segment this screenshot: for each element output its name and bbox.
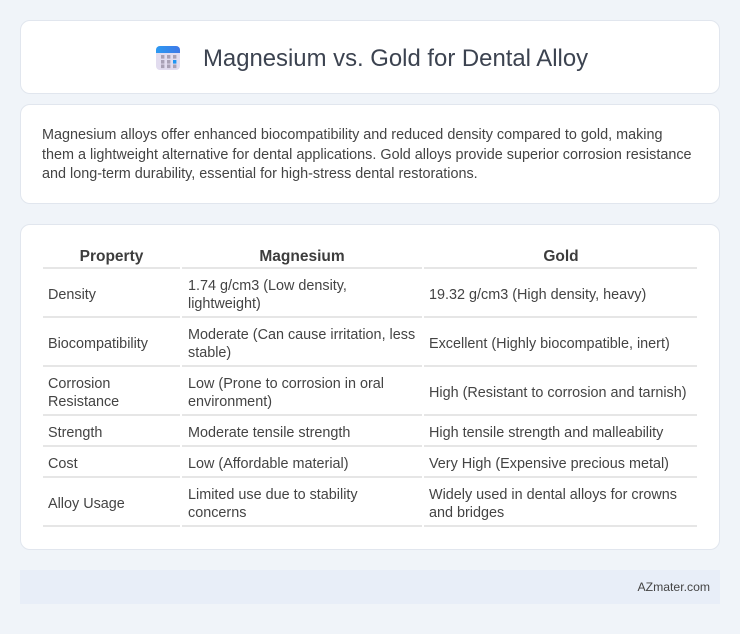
row: Alloy Usage: Widely used in dental alloys for crowns [429, 487, 677, 503]
row: Strength: Strength [48, 425, 102, 441]
row: Corrosion Resistance: High (Resistant to corrosion and tarnish) [429, 385, 687, 401]
row: Cost: Low (Affordable material) [188, 456, 349, 472]
row: Strength: Moderate tensile strength [188, 425, 350, 441]
row: Density: lightweight) [188, 296, 261, 312]
row: Strength [48, 425, 664, 441]
table header: Magnesium: Magnesium [259, 248, 345, 265]
summary text: Magnesium alloys offer enhanced biocompatibility and reduced density compared to gold, making [42, 127, 662, 143]
row: Density: 1.74 g/cm3 (Low density, [188, 278, 347, 294]
row: Alloy Usage: Limited use due to stability [188, 487, 358, 503]
panel: comparison table [20, 224, 720, 550]
row: Corrosion Resistance: Resistance [48, 394, 119, 410]
table header: Gold: Gold [543, 248, 579, 265]
footer bar [20, 570, 720, 604]
row: Corrosion Resistance: environment) [188, 394, 272, 410]
table header: Property: Property [80, 248, 143, 265]
row: Alloy Usage: and bridges [429, 505, 504, 521]
row: Biocompatibility: stable) [188, 345, 231, 361]
summary text: and long-term durability, essential for high-stress dental restorations. [42, 166, 478, 182]
panel: title card [20, 20, 720, 94]
row: Cost: Very High (Expensive precious metal) [429, 456, 669, 472]
row: Biocompatibility [48, 327, 670, 361]
summary text [42, 127, 692, 182]
row: Density [48, 278, 646, 312]
row: Cost: Cost [48, 456, 78, 472]
row: Corrosion Resistance: Corrosion [48, 376, 110, 392]
row: Density: Density [48, 287, 96, 303]
row: Biocompatibility: Biocompatibility [48, 336, 148, 352]
row: Cost [48, 456, 669, 472]
row: Biocompatibility: Moderate (Can cause irritation, less [188, 327, 415, 343]
row: Alloy Usage: concerns [188, 505, 246, 521]
row: Strength: High tensile strength and malleability [429, 425, 663, 441]
footer credit: AZmater.com [638, 580, 710, 594]
row: Alloy Usage [48, 487, 677, 521]
icon: calendar grid [156, 46, 180, 70]
row: Corrosion Resistance: Low (Prone to corrosion in oral [188, 376, 384, 392]
row: Biocompatibility: Excellent (Highly biocompatible, inert) [429, 336, 670, 352]
row: Alloy Usage: Alloy Usage [48, 496, 125, 512]
panel: summary [20, 104, 720, 204]
title: Magnesium vs. Gold for Dental Alloy [203, 45, 588, 72]
row: Corrosion Resistance [48, 376, 687, 410]
row: Density: 19.32 g/cm3 (High density, heavy) [429, 287, 646, 303]
summary text: them a lightweight alternative for dental applications. Gold alloys provide superior corrosion resistance [42, 146, 692, 162]
